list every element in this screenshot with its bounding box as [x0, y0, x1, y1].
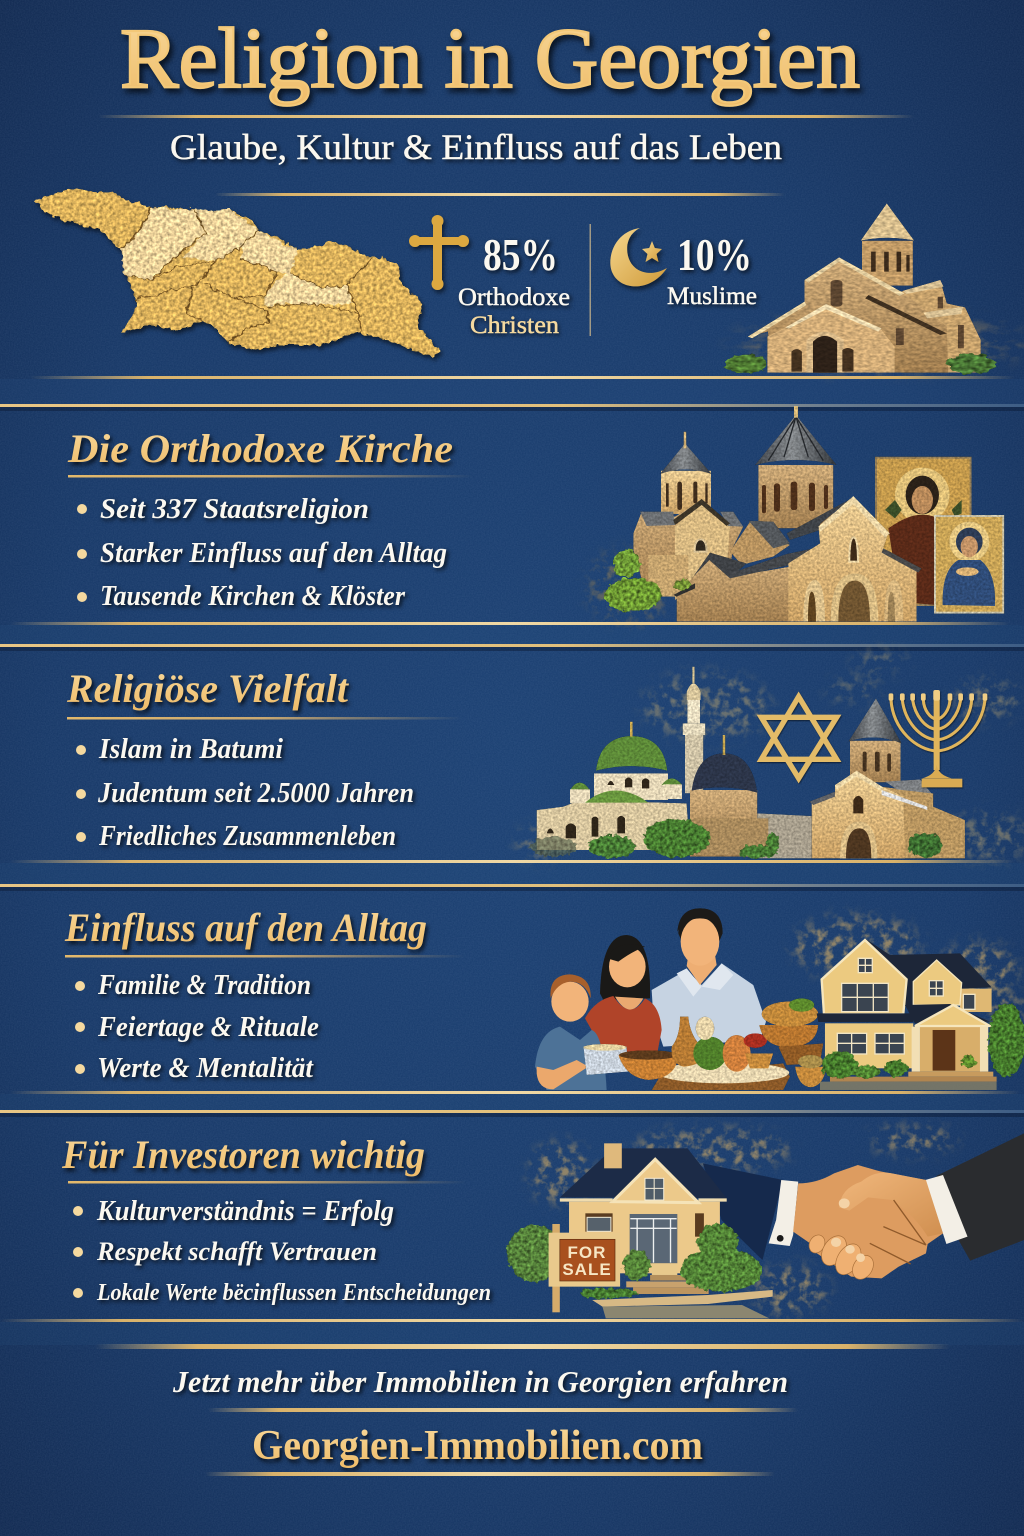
label orthodoxe: Orthodoxe	[458, 284, 570, 311]
bullet list	[75, 970, 319, 1084]
footer call to action: Jetzt mehr über Immobilien in Georgien erfahren	[172, 1364, 788, 1399]
title rule	[98, 115, 914, 118]
menorah	[889, 690, 987, 787]
illustration: churches and icons	[587, 406, 1003, 623]
subtitle: Glaube, Kultur & Einfluss auf das Leben	[170, 127, 782, 167]
left sleeve	[703, 1163, 783, 1260]
rule: section top	[0, 884, 1024, 887]
rule	[10, 622, 1010, 625]
bullet list: Feiertage & Rituale	[97, 1012, 319, 1043]
top rule	[215, 193, 785, 196]
left church	[633, 432, 743, 600]
rule: footer top	[95, 1344, 950, 1349]
illustration: mosque, star, menorah, church	[517, 652, 1024, 860]
handshake	[769, 1165, 968, 1283]
sign text: FOR	[568, 1243, 606, 1262]
bullet list: Tausende Kirchen & Klöster	[100, 581, 406, 612]
10 percent: 10%	[677, 229, 752, 280]
bullet list: Seit 337 Staatsreligion	[100, 494, 369, 525]
footer rule	[205, 1472, 775, 1476]
heading: Die Orthodoxe Kirche	[67, 426, 453, 471]
sign text: SALE	[562, 1260, 612, 1279]
mosque	[537, 667, 705, 850]
icon panel large	[876, 458, 971, 605]
for sale sign frame	[549, 1224, 620, 1312]
bullet list: Respekt schafft Vertrauen	[96, 1237, 377, 1266]
dark dome	[690, 735, 812, 858]
rule	[10, 860, 1015, 863]
icon: orthodox cross	[409, 215, 469, 290]
icon: crescent and star	[610, 228, 667, 286]
son	[535, 974, 607, 1090]
title: Religion in Georgien	[120, 10, 860, 106]
trees	[530, 819, 942, 858]
bullet list: Familie & Tradition	[97, 970, 311, 1001]
heading rule	[68, 1181, 466, 1184]
bushes	[507, 1223, 762, 1299]
heading: Einfluss auf den Alltag	[64, 905, 427, 950]
house	[560, 1143, 773, 1318]
heading: Für Investoren wichtig	[61, 1132, 425, 1177]
main church	[673, 496, 922, 622]
rule	[10, 1091, 1020, 1094]
rule: section top	[0, 1110, 1024, 1113]
bullet list: Friedliches Zusammenleben	[98, 821, 396, 852]
map of Georgia	[36, 188, 441, 357]
mother	[585, 935, 662, 1057]
bullet list: Kulturverständnis = Erfolg	[96, 1196, 394, 1227]
panel: orthodox church	[67, 406, 1003, 623]
footer URL: Georgien-Immobilien.com	[252, 1423, 703, 1469]
bullet list	[77, 494, 447, 612]
rule: section top	[0, 404, 1024, 407]
trees	[605, 549, 693, 612]
central drum	[755, 406, 837, 528]
85 percent: 85%	[483, 229, 558, 280]
bullet list: Starker Einfluss auf den Alltag	[100, 538, 447, 569]
stat: muslims	[610, 228, 757, 310]
bullet list	[76, 734, 414, 852]
table and food	[583, 998, 827, 1090]
father	[652, 908, 766, 1047]
rule: section top	[0, 644, 1024, 647]
icon panel small	[935, 516, 1003, 613]
bullet list: Islam in Batumi	[98, 734, 283, 765]
bushes	[822, 1003, 1024, 1079]
bullet list: Judentum seit 2.5000 Jahren	[97, 778, 414, 809]
bullet list: Lokale Werte bëcinflussen Entscheidungen	[96, 1280, 491, 1306]
heading: Religiöse Vielfalt	[66, 666, 350, 711]
label muslime: Muslime	[667, 283, 757, 310]
illustration: family and house	[535, 908, 1024, 1090]
panel: religious diversity	[66, 652, 1024, 860]
rule: end of hero	[30, 376, 1015, 379]
illustration: hero church	[724, 203, 1024, 374]
bullet list: Werte & Mentalität	[97, 1053, 314, 1084]
divider	[590, 224, 591, 336]
heading rule	[67, 717, 462, 720]
illustration: house and handshake	[507, 1128, 1024, 1318]
panel: for investors	[61, 1128, 1024, 1318]
heading rule	[65, 955, 465, 958]
label christen: Christen	[470, 312, 560, 339]
star of David	[761, 697, 837, 778]
footer rule	[208, 1408, 798, 1412]
heading rule	[68, 475, 473, 478]
stat: orthodox christians	[409, 215, 570, 339]
rule	[0, 1319, 1024, 1322]
right church	[809, 698, 965, 858]
bullet list	[73, 1196, 491, 1306]
house	[817, 938, 997, 1090]
panel: daily life	[64, 905, 1024, 1090]
right sleeve	[936, 1133, 1024, 1261]
